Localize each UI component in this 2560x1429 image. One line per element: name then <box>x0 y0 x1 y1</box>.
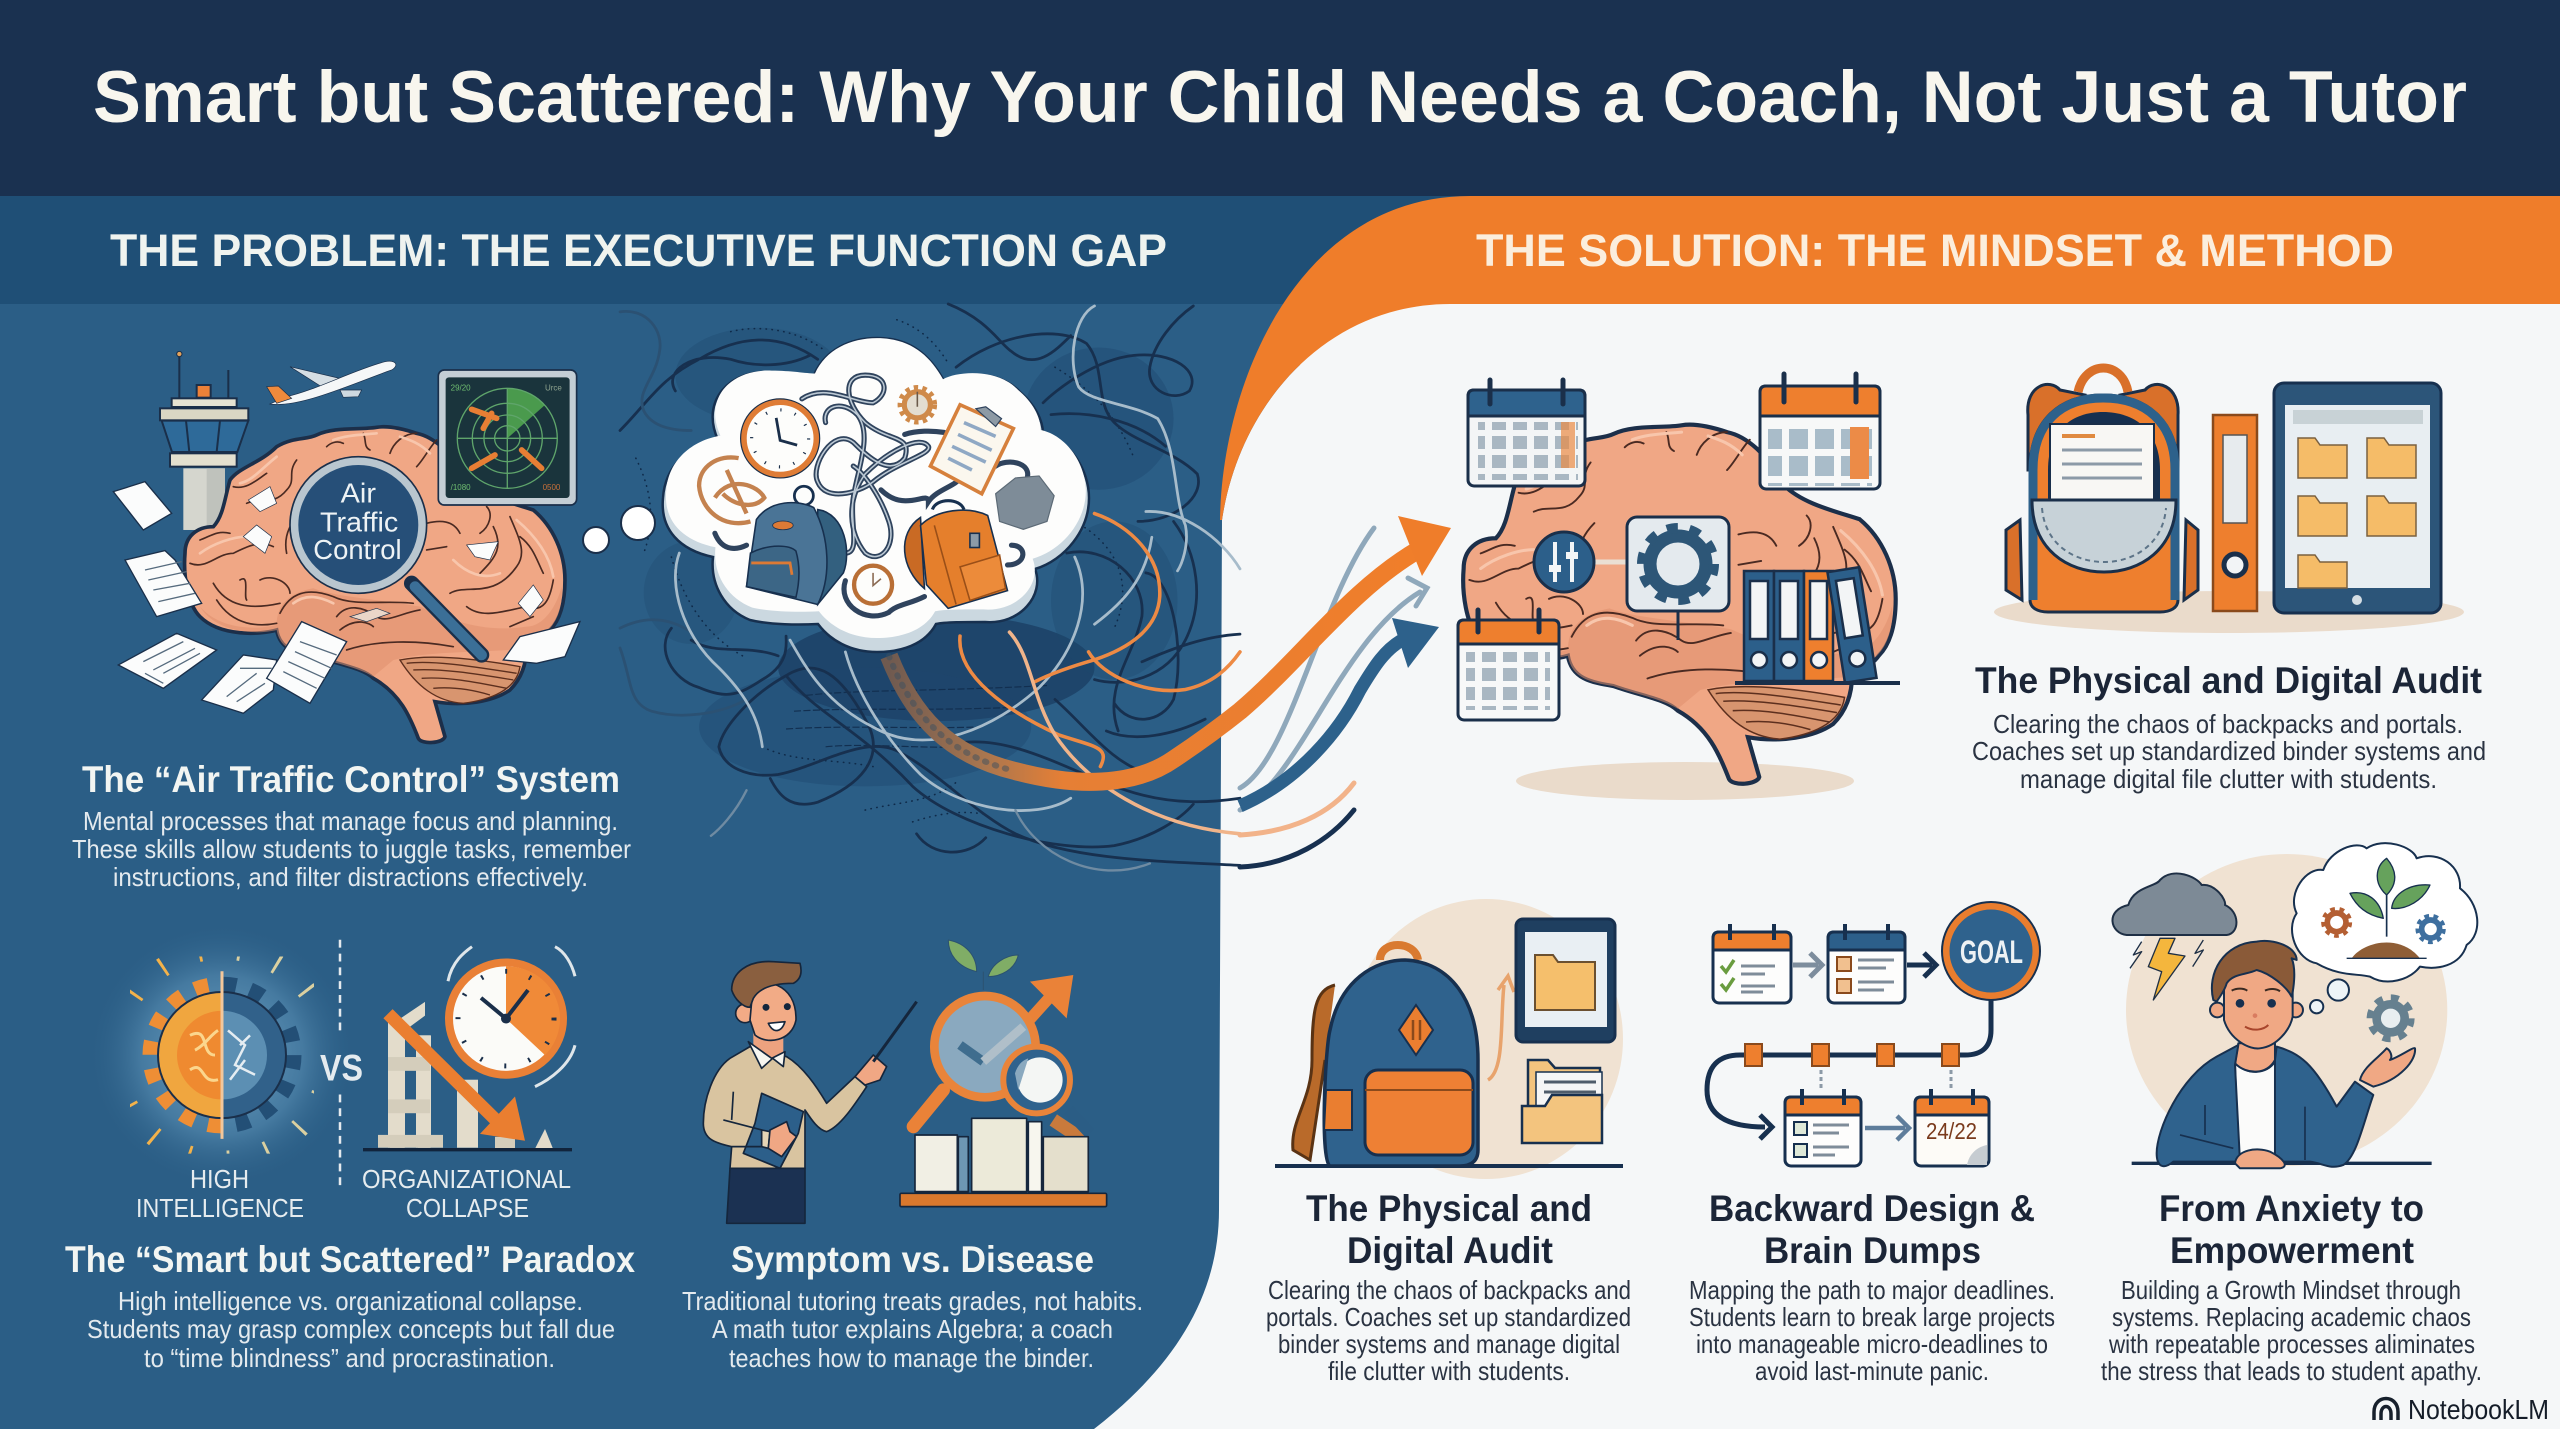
icon: brain <box>185 427 565 743</box>
text: air traffic control system: Mental processes that manage focus and planning. <box>83 806 618 836</box>
text: physical and digital audit top: manage digital file clutter with students. <box>2020 764 2437 794</box>
text: from anxiety to empowerment: systems. Replacing academic chaos <box>2112 1302 2471 1332</box>
tangled wires <box>715 375 1028 616</box>
icon: orange calendar <box>1760 374 1880 489</box>
icon: goal circle <box>1942 902 2040 1000</box>
arrow: backpack to tablet <box>1488 976 1514 1080</box>
icon: radar screen: 0500 <box>543 483 561 492</box>
heading: the problem: THE PROBLEM: THE EXECUTIVE FUNCTION GAP <box>110 225 1167 276</box>
heading: the solution: THE SOLUTION: THE MINDSET & METHOD <box>1476 225 2394 276</box>
icon: open backpack <box>2006 368 2198 612</box>
icon: goal circle: GOAL <box>1960 934 2023 970</box>
text: smart but scattered paradox: The “Smart but Scattered” Paradox <box>65 1239 635 1280</box>
icon: calendar with date <box>1915 1089 1989 1166</box>
icon: radar screen <box>438 370 577 505</box>
icon: blue backpack <box>747 486 847 604</box>
text: physical and digital audit top: Coaches set up standardized binder systems and <box>1972 736 2486 766</box>
icon: teacher with pointer <box>703 962 917 1223</box>
icon: crumpled paper <box>996 476 1054 529</box>
text: physical and digital audit bottom: portals. Coaches set up standardized <box>1266 1302 1631 1332</box>
icon: calendar with date: 24/22 <box>1926 1118 1977 1144</box>
icon: blue calendar <box>1468 380 1585 486</box>
arrow <box>1793 953 1822 977</box>
text: smart but scattered paradox: to “time blindness” and procrastination. <box>144 1343 555 1373</box>
icon: control tower <box>160 351 248 530</box>
text: physical and digital audit top: The Physical and Digital Audit <box>1975 660 2482 701</box>
text: symptom vs disease: A math tutor explains Algebra; a coach <box>712 1314 1113 1344</box>
icon: magnifiers, growth arrow and blocks <box>900 940 1107 1207</box>
text: air traffic control system <box>72 759 631 892</box>
text: backward design and brain dumps: Mapping the path to major deadlines. <box>1689 1275 2055 1305</box>
text: air traffic control system: These skills allow students to juggle tasks, remember <box>72 834 631 864</box>
arrow: thin grey-blue arrows toward the organized brain <box>1240 528 1427 810</box>
text: backward design and brain dumps <box>1689 1188 2055 1386</box>
thought cloud of clutter <box>663 338 1089 652</box>
arrow: blue arrow <box>1240 618 1439 806</box>
icon: thought cloud with plant <box>2292 843 2477 981</box>
header band <box>0 0 2560 196</box>
icon: tablet <box>1516 919 1615 1042</box>
icon: person <box>2157 941 2415 1168</box>
timeline connector <box>1707 1000 1991 1139</box>
title: Smart but Scattered: Why Your Child Needs a Coach, Not Just a Tutor <box>93 57 2467 138</box>
icon: gear in box <box>1627 517 1729 640</box>
text: symptom vs disease: teaches how to manage the binder. <box>729 1343 1094 1373</box>
illustration: organized brain with calendars and binders <box>1458 374 1900 784</box>
arrow <box>1907 953 1936 977</box>
icon: wall clock <box>741 399 820 478</box>
labels: high intelligence and organizational collapse: HIGH <box>190 1164 249 1194</box>
icon: magnifier labelled Air Traffic Control: Control <box>313 534 402 565</box>
text: backward design and brain dumps: Students learn to break large projects <box>1689 1302 2055 1332</box>
text: backward design and brain dumps: avoid last-minute panic. <box>1755 1356 1989 1386</box>
papers scattered around the brain <box>113 482 580 713</box>
text: physical and digital audit bottom: Digital Audit <box>1347 1230 1553 1271</box>
icon: brain <box>1463 425 1896 784</box>
icon: storm cloud <box>2112 873 2236 1000</box>
text: backward design and brain dumps: Brain Dumps <box>1764 1230 1981 1271</box>
icon: calendar with checks <box>1713 924 1791 1003</box>
icon: magnifier labelled Air Traffic Control <box>290 457 482 655</box>
text: smart but scattered paradox: High intelligence vs. organizational collapse. <box>118 1286 583 1316</box>
tangled scribbles around the thought cloud <box>620 304 1240 870</box>
labels: high intelligence and organizational collapse: INTELLIGENCE <box>136 1193 304 1223</box>
divider with VS: VS <box>320 1047 363 1089</box>
text: from anxiety to empowerment: the stress that leads to student apathy. <box>2101 1356 2482 1386</box>
thought bubbles <box>583 506 655 553</box>
panel: problem background <box>0 304 1300 1429</box>
icon: binders <box>1735 567 1900 683</box>
icon: small gear <box>900 387 935 422</box>
panel: solution heading band <box>1220 196 2560 520</box>
text: symptom vs disease <box>682 1239 1143 1373</box>
text: physical and digital audit top: Clearing the chaos of backpacks and portals. <box>1993 709 2463 739</box>
text: physical and digital audit bottom: Clearing the chaos of backpacks and <box>1268 1275 1631 1305</box>
text: physical and digital audit bottom: The Physical and <box>1306 1188 1592 1229</box>
text: smart but scattered paradox <box>65 1239 635 1373</box>
icon: calendar with checklist <box>1785 1089 1861 1166</box>
icon: gear above hand <box>2370 998 2411 1039</box>
icon: small stopwatch <box>854 566 892 604</box>
icon: magnifier labelled Air Traffic Control: Traffic <box>320 507 398 538</box>
illustration: brain with air traffic control <box>113 351 580 743</box>
text: symptom vs disease: Symptom vs. Disease <box>731 1239 1094 1280</box>
text: backward design and brain dumps: into manageable micro-deadlines to <box>1696 1329 2048 1359</box>
icon: folder with files <box>1522 1060 1602 1143</box>
icon: airplane <box>267 361 396 404</box>
thought dots <box>2310 979 2349 1013</box>
icon: backpack <box>1293 945 1478 1166</box>
shadow under backpack and tablet <box>1994 591 2464 633</box>
text: from anxiety to empowerment: Empowerment <box>2170 1230 2414 1271</box>
icon: radar screen: Urce <box>545 384 562 393</box>
labels: high intelligence and organizational collapse <box>136 1164 571 1223</box>
illustration: backpack, tablet and folder <box>1275 899 1623 1179</box>
text: physical and digital audit bottom: binder systems and manage digital <box>1278 1329 1620 1359</box>
text: from anxiety to empowerment: Building a Growth Mindset through <box>2121 1275 2461 1305</box>
icon: radar screen: 29/20 <box>451 384 471 393</box>
arrow: large orange arrow <box>889 516 1451 782</box>
text: from anxiety to empowerment: with repeatable processes aliminates <box>2108 1329 2475 1359</box>
text: smart but scattered paradox: Students may grasp complex concepts but fall due <box>87 1314 615 1344</box>
icon: calendar with tasks <box>1828 924 1905 1003</box>
text: physical and digital audit bottom: file clutter with students. <box>1328 1356 1570 1386</box>
shadow under brain <box>1516 762 1854 800</box>
milestone markers <box>1745 1044 1959 1066</box>
panel: problem heading band <box>0 196 1500 304</box>
arrow: peach and navy curves on the white panel <box>1240 783 1354 867</box>
arrow <box>1865 1116 1909 1140</box>
text: backward design and brain dumps: Backward Design & <box>1709 1188 2035 1229</box>
labels: high intelligence and organizational collapse: ORGANIZATIONAL <box>362 1164 571 1194</box>
labels: high intelligence and organizational collapse: COLLAPSE <box>406 1193 529 1223</box>
text: air traffic control system: instructions, and filter distractions effectively. <box>113 862 588 892</box>
icon: magnifier labelled Air Traffic Control: Air <box>341 477 376 508</box>
text: from anxiety to empowerment <box>2101 1188 2482 1386</box>
icon: clipboard <box>930 405 1013 494</box>
icon: sliders circle <box>1534 532 1630 592</box>
icon: orange binder <box>2213 415 2257 611</box>
icon: organizational collapse clock and falling building <box>363 947 575 1150</box>
icon: lower calendar <box>1458 610 1559 720</box>
illustration: from anxiety to empowerment <box>2112 843 2477 1168</box>
illustration: backward design timeline <box>1707 902 2040 1166</box>
panel: solution background <box>1094 304 2560 1429</box>
text: physical and digital audit top <box>1972 660 2486 794</box>
icon: split gear high intelligence <box>116 951 328 1160</box>
icon: tangled ring <box>699 457 764 523</box>
icon: tablet with folders <box>2274 383 2441 613</box>
text: air traffic control system: The “Air Traffic Control” System <box>82 759 620 800</box>
icon: radar screen: /1080 <box>451 483 471 492</box>
text: from anxiety to empowerment: From Anxiety to <box>2159 1188 2424 1229</box>
icon: orange backpack <box>905 501 1007 608</box>
text: physical and digital audit bottom <box>1266 1188 1631 1386</box>
text: symptom vs disease: Traditional tutoring treats grades, not habits. <box>682 1286 1143 1316</box>
